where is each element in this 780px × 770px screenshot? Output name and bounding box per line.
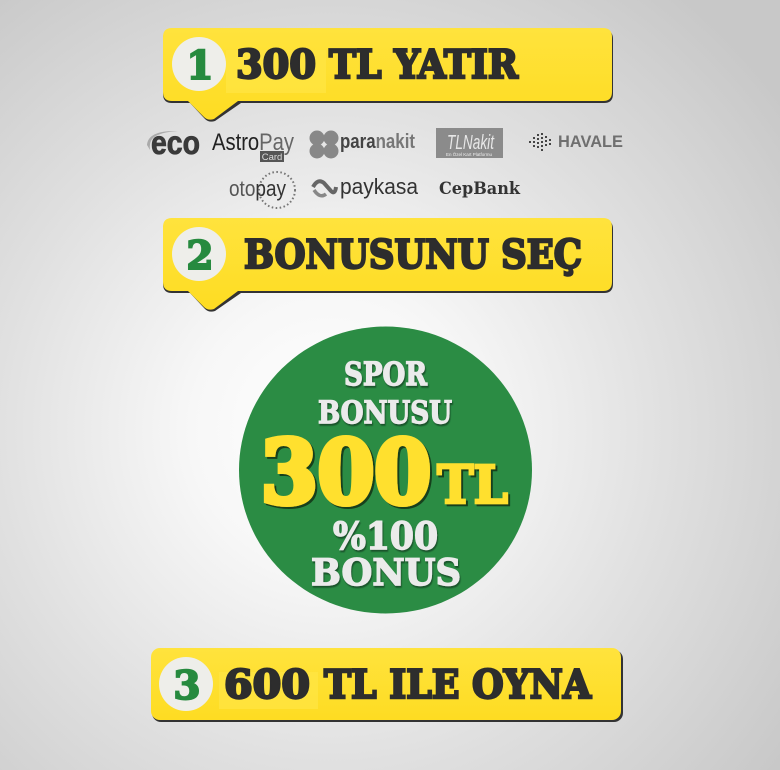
step 1 banner [163, 28, 613, 122]
step 3 number badge: 3 [173, 663, 201, 709]
logo: AstroPay Card: Card [262, 152, 282, 163]
label: spor: SPOR [344, 355, 427, 393]
logo: otopay [229, 172, 295, 208]
step 1 heading: TL YATIR [329, 42, 519, 88]
payment logos [147, 124, 623, 208]
step 3 number badge [159, 657, 213, 711]
logo: paranakit [310, 130, 415, 158]
step 2 banner [163, 218, 613, 312]
step 2 number badge: 2 [186, 233, 214, 279]
step 2 heading: BONUSUNU SEÇ [244, 232, 582, 278]
step 1 heading [236, 42, 519, 88]
label: %100: %100 [333, 514, 438, 558]
logo: Havale [529, 132, 623, 151]
logo: paranakit: paranakit [340, 131, 415, 153]
label: bonus: BONUS [311, 552, 461, 594]
logo: TL Nakit: En Özel Kart Platformu [446, 151, 492, 157]
logo: paykasa: paykasa [340, 174, 419, 199]
logo: TL Nakit [436, 128, 503, 158]
bonus circle [239, 326, 532, 614]
step 3 heading: TL ILE OYNA [324, 662, 592, 708]
step 3 heading: 600 [224, 662, 310, 708]
logo: otopay: otopay [229, 176, 286, 201]
amount: 300: 300 [261, 421, 431, 524]
step 1 number badge: 1 [186, 43, 214, 89]
label: bonusu: BONUSU [318, 395, 452, 431]
amount: TL: TL [437, 455, 508, 516]
step 3 banner [151, 648, 623, 722]
logo: AstroPay Card: AstroPay [212, 129, 294, 156]
step 1 heading: 300 [236, 42, 316, 88]
logo: CepBank: CepBank [439, 179, 521, 199]
step 3 heading [224, 662, 592, 708]
logo: Havale: HAVALE [558, 132, 623, 151]
logo: TL Nakit: TLNakit [447, 132, 495, 154]
step 2 number badge [172, 227, 226, 281]
step 1 number badge [172, 37, 226, 91]
logo: eco: eco [151, 124, 200, 161]
